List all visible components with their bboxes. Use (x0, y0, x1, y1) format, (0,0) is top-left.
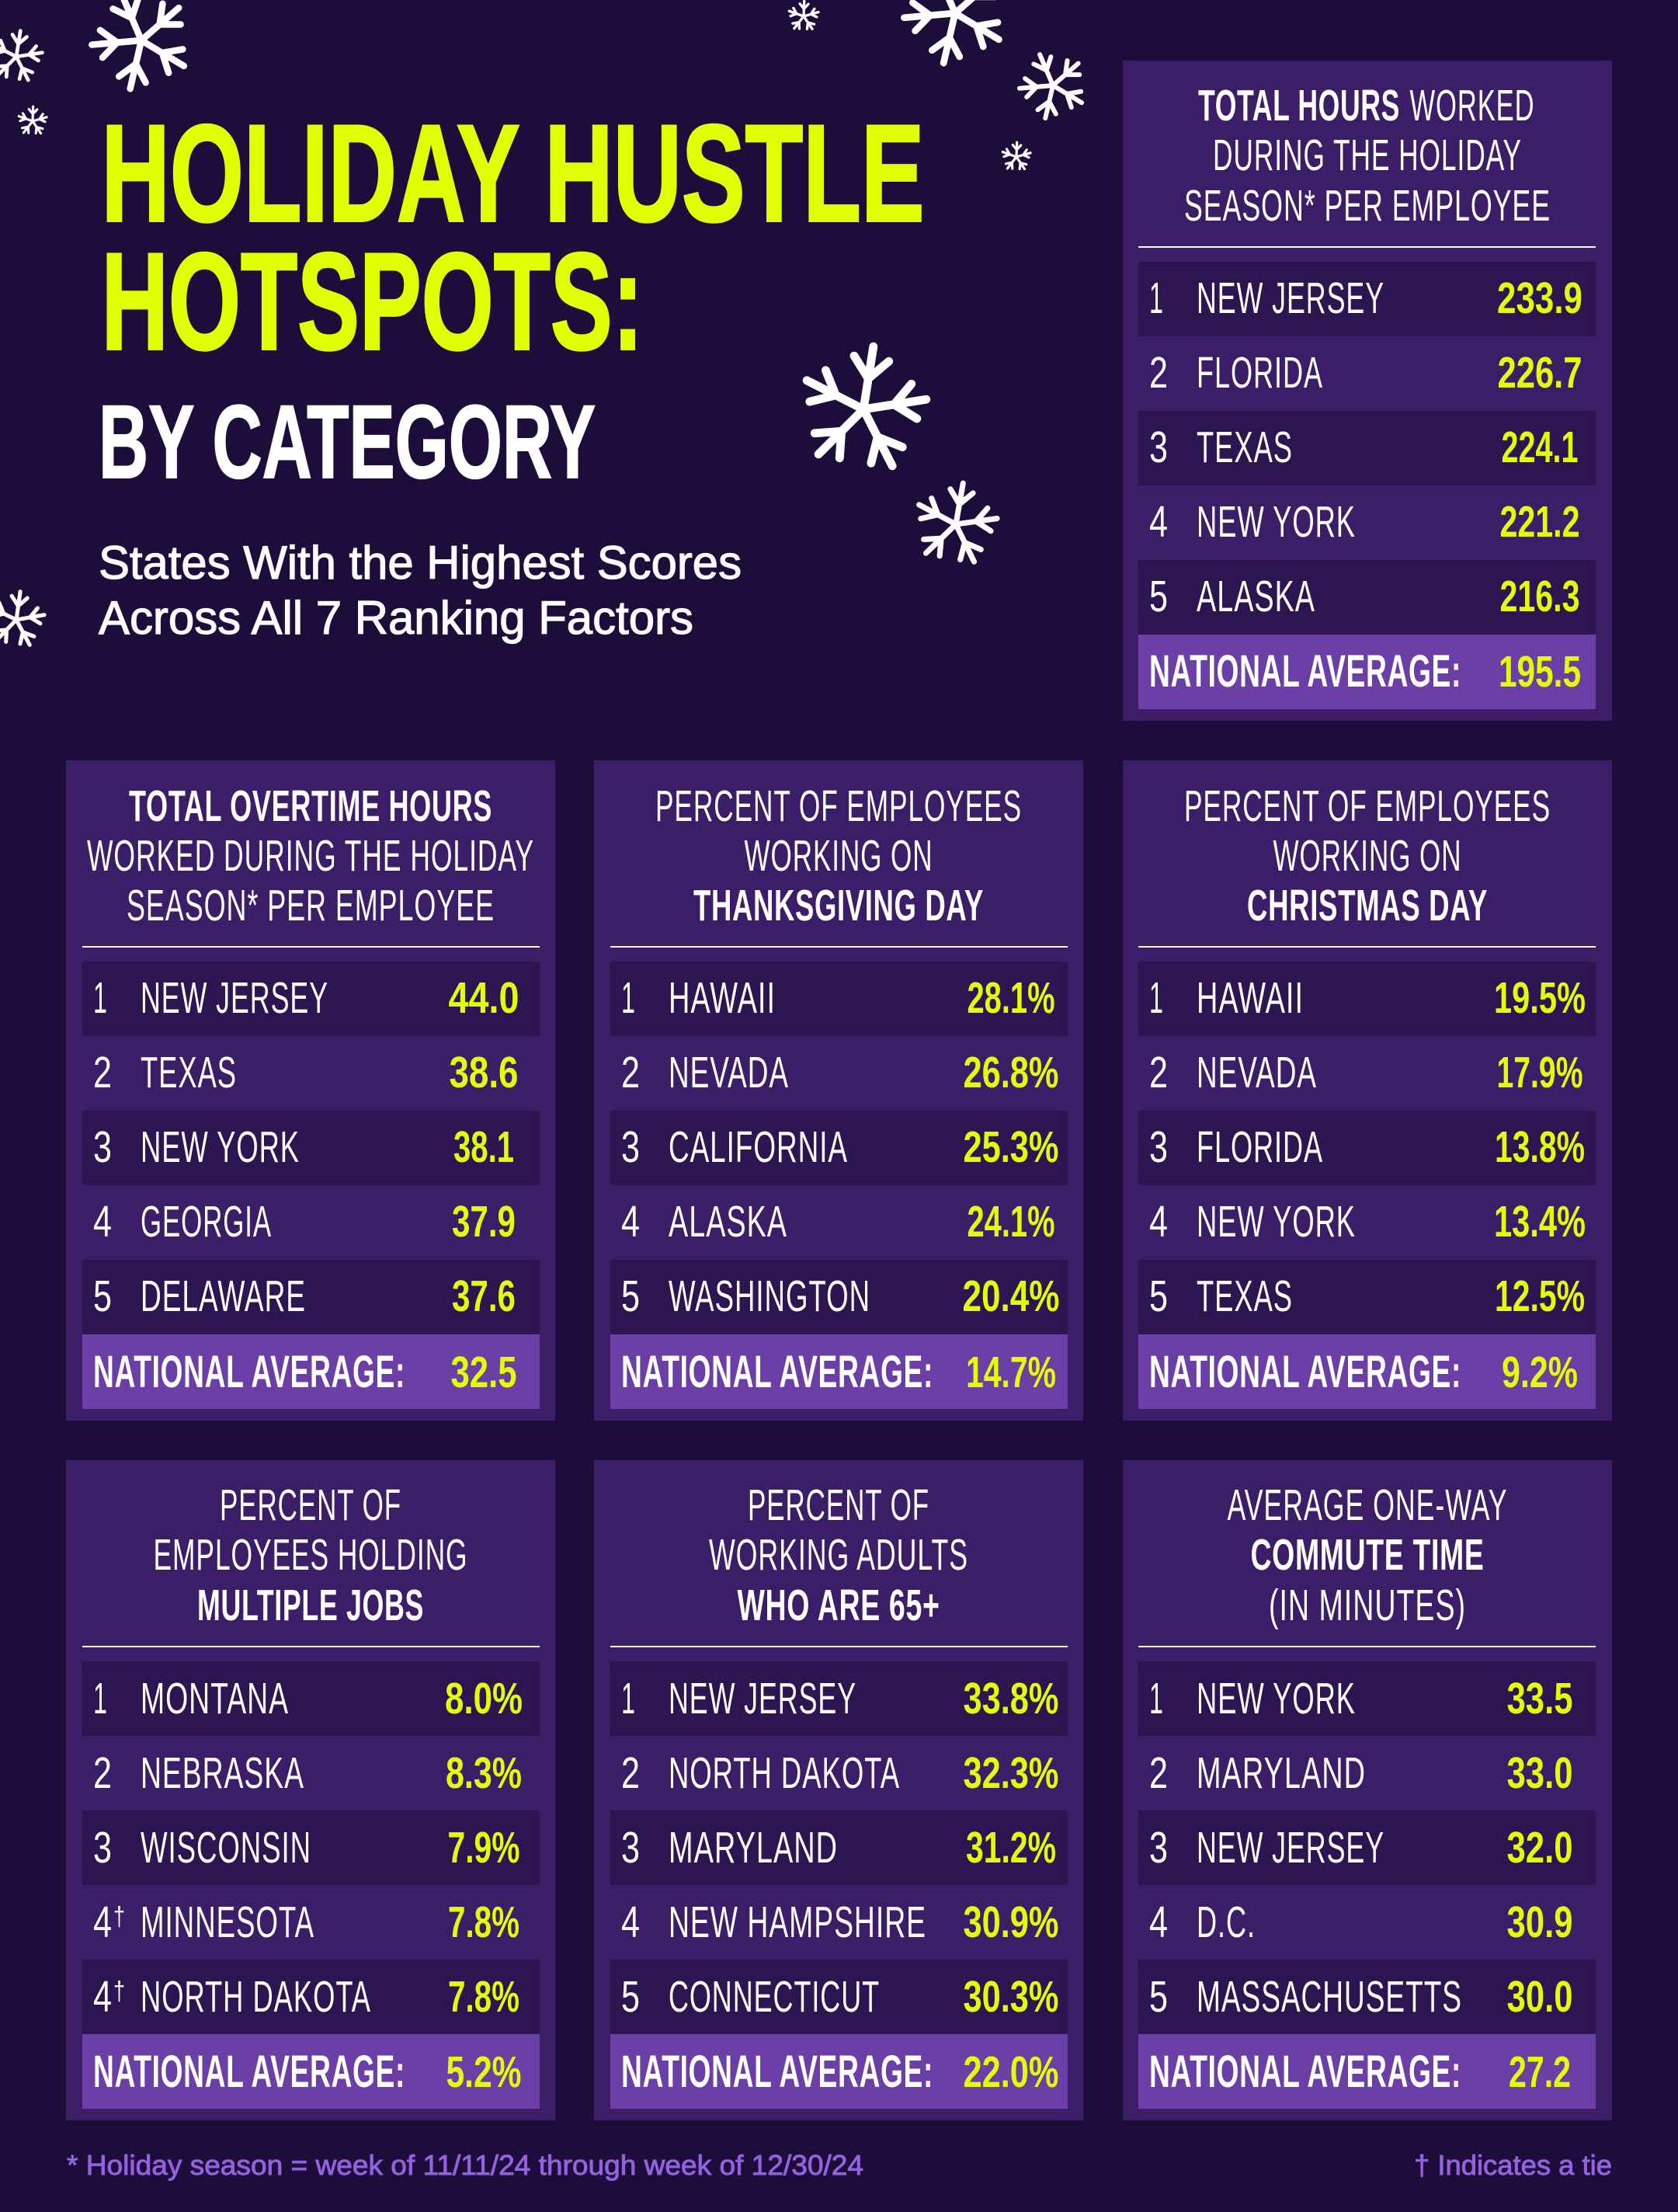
row 2: MARYLAND (1197, 1748, 1366, 1798)
row 2: 38.6 (449, 1048, 519, 1097)
row 2: 2 (621, 1048, 640, 1097)
row 1: NEW JERSEY (141, 973, 328, 1023)
heading: working adults 65+: WHO ARE 65+ (738, 1581, 940, 1630)
row 2: FLORIDA (1197, 348, 1323, 398)
row 5: 216.3 (1500, 572, 1579, 621)
row 1: 1 (1149, 973, 1163, 1023)
national average: NATIONAL AVERAGE: (1149, 2047, 1461, 2097)
row 4: NEW HAMPSHIRE (669, 1897, 926, 1947)
row 2: NEBRASKA (141, 1748, 304, 1798)
row 3: 3 (621, 1823, 640, 1873)
row 3 (1138, 1111, 1596, 1185)
row 2: 17.9% (1497, 1048, 1582, 1097)
row 5: 20.4% (963, 1271, 1059, 1321)
national average: 9.2% (1502, 1348, 1578, 1397)
row 5: MASSACHUSETTS (1197, 1972, 1462, 2022)
row 1: 1 (1149, 273, 1163, 323)
row 2 (93, 1748, 522, 1798)
row 4: D.C. (1197, 1897, 1256, 1947)
row 5: NORTH DAKOTA (141, 1972, 371, 2022)
heading: overtime hours: TOTAL OVERTIME HOURS (129, 781, 492, 831)
row 2: 2 (621, 1748, 640, 1798)
row 1: 44.0 (449, 973, 519, 1023)
heading: total hours worked: WORKED (1410, 81, 1534, 130)
national average (82, 1334, 540, 1409)
row 4: 24.1% (968, 1197, 1054, 1247)
row 2: 2 (93, 1048, 112, 1097)
icon: snowflake small left (17, 106, 48, 136)
panel: christmas day (1123, 760, 1612, 1421)
row 5: 37.6 (452, 1271, 516, 1321)
row 3 (1138, 411, 1596, 485)
row 1: 1 (93, 973, 107, 1023)
heading: overtime hours: SEASON* PER EMPLOYEE (127, 881, 495, 930)
row 3: TEXAS (1197, 423, 1293, 472)
row 1: 1 (621, 973, 635, 1023)
row 2: TEXAS (141, 1048, 237, 1097)
row 5: 7.8% (448, 1972, 519, 2022)
row 4: 7.8% (448, 1897, 519, 1947)
heading: multiple jobs: PERCENT OF (220, 1480, 401, 1530)
national average (610, 2034, 1068, 2109)
row 3: 7.9% (447, 1823, 520, 1873)
icon: snowflake big center (789, 336, 939, 481)
icon: snowflake small right (1001, 142, 1032, 172)
row 5: 5 (1149, 1271, 1168, 1321)
national average: 22.0% (963, 2047, 1059, 2097)
row 3: 38.1 (453, 1122, 514, 1172)
row 4: ALASKA (669, 1197, 787, 1247)
row 4: GEORGIA (141, 1197, 272, 1247)
heading: overtime hours (87, 781, 534, 930)
row 4: 37.9 (452, 1197, 516, 1247)
row 2: 2 (1149, 1748, 1168, 1798)
heading: christmas day: CHRISTMAS DAY (1247, 881, 1488, 930)
row 1: 1 (1149, 1674, 1163, 1723)
row 1: 33.5 (1506, 1674, 1573, 1723)
row 5: ALASKA (1197, 572, 1315, 621)
footnote: holiday season: * Holiday season = week of 11/11/24 through week of 12/30/24 (67, 2149, 863, 2181)
row 3: FLORIDA (1197, 1122, 1323, 1172)
heading: working adults 65+: WORKING ADULTS (709, 1530, 968, 1580)
row 1: HAWAII (1197, 973, 1304, 1023)
row 3: 25.3% (963, 1122, 1059, 1172)
national average (82, 2034, 540, 2109)
panel: total hours worked (1123, 61, 1612, 721)
row 2: 226.7 (1497, 348, 1582, 398)
heading: commute time: (IN MINUTES) (1269, 1581, 1466, 1630)
row 2: 32.3% (963, 1748, 1059, 1798)
row 1 (1138, 262, 1596, 336)
row 1 (1138, 1661, 1596, 1736)
row 3: 13.8% (1495, 1122, 1585, 1172)
row 5 (1138, 1960, 1596, 2034)
row 1 (610, 962, 1068, 1036)
icon: snowflake top left large (71, 0, 213, 111)
icon: snowflake right medium (1006, 37, 1101, 133)
row 1: NEW JERSEY (1197, 273, 1384, 323)
row 5: 5 (93, 1271, 112, 1321)
row 2 (1149, 348, 1582, 398)
heading: total hours worked: TOTAL HOURS (1198, 81, 1400, 130)
heading: multiple jobs (154, 1480, 467, 1630)
national average: 14.7% (966, 1348, 1056, 1397)
row 5: 5 (621, 1271, 640, 1321)
row 3: 224.1 (1502, 423, 1578, 472)
national average: NATIONAL AVERAGE: (93, 1347, 405, 1397)
footnote: tie: † Indicates a tie (1414, 2149, 1612, 2181)
heading: thanksgiving day: WORKING ON (744, 831, 933, 881)
row 2 (621, 1048, 1059, 1097)
national average (610, 1334, 1068, 1409)
icon: snowflake medium center (906, 476, 1006, 572)
row 2: 2 (1149, 348, 1168, 398)
row 1: 1 (93, 1674, 107, 1723)
row 3: 3 (1149, 1823, 1168, 1873)
national average: NATIONAL AVERAGE: (93, 2047, 405, 2097)
row 1: MONTANA (141, 1674, 289, 1723)
row 3 (610, 1111, 1068, 1185)
row 3 (1138, 1810, 1596, 1885)
row 1 (82, 1661, 540, 1736)
panel: overtime hours (66, 760, 555, 1421)
row 5 (82, 1960, 540, 2034)
heading: working adults 65+: PERCENT OF (748, 1480, 929, 1530)
row 3: 3 (93, 1823, 112, 1873)
row 2: 2 (1149, 1048, 1168, 1097)
row 2: NEVADA (1197, 1048, 1317, 1097)
row 3: CALIFORNIA (669, 1122, 848, 1172)
row 1: NEW YORK (1197, 1674, 1356, 1723)
row 1: 19.5% (1494, 973, 1586, 1023)
row 1 (82, 962, 540, 1036)
heading: commute time (1227, 1480, 1508, 1630)
panel: multiple jobs (66, 1460, 555, 2120)
heading: thanksgiving day (655, 781, 1022, 930)
row 5 (1138, 560, 1596, 635)
row 4: 221.2 (1500, 497, 1579, 547)
title: HOLIDAY HUSTLE (101, 96, 924, 250)
row 4: † (113, 1902, 125, 1932)
title (101, 96, 924, 379)
row 2: NEVADA (669, 1048, 789, 1097)
heading: thanksgiving day: PERCENT OF EMPLOYEES (655, 781, 1022, 831)
row 2 (93, 1048, 519, 1097)
row 5: 12.5% (1495, 1271, 1585, 1321)
row 2 (1149, 1748, 1573, 1798)
row 5 (610, 1960, 1068, 2034)
row 3: MARYLAND (669, 1823, 838, 1873)
row 5: DELAWARE (141, 1271, 306, 1321)
row 4: 4 (1149, 497, 1168, 547)
row 5: 30.3% (963, 1972, 1059, 2022)
heading: thanksgiving day: THANKSGIVING DAY (693, 881, 984, 930)
national average (1138, 1334, 1596, 1409)
title: HOTSPOTS: (101, 224, 643, 379)
row 4: 13.4% (1494, 1197, 1586, 1247)
heading: multiple jobs: EMPLOYEES HOLDING (154, 1530, 467, 1580)
row 1: 233.9 (1497, 273, 1582, 323)
row 5: 4 (93, 1972, 112, 2022)
row 2: NORTH DAKOTA (669, 1748, 900, 1798)
subtitle: by category: BY CATEGORY (99, 384, 596, 500)
row 1: 8.0% (445, 1674, 523, 1723)
icon: snowflake small top (787, 1, 820, 32)
icon: snowflake top right large (883, 0, 1028, 85)
row 2: 8.3% (446, 1748, 522, 1798)
row 5: 5 (1149, 572, 1168, 621)
row 4: NEW YORK (1197, 1197, 1356, 1247)
row 5 (82, 1260, 540, 1334)
national average: NATIONAL AVERAGE: (621, 1347, 933, 1397)
row 4 (1149, 1197, 1586, 1247)
description text (99, 537, 742, 644)
icon: snowflake left edge (0, 26, 47, 86)
row 1: 1 (621, 1674, 635, 1723)
row 3: 32.0 (1506, 1823, 1573, 1873)
row 2: 33.0 (1506, 1748, 1573, 1798)
row 5: 30.0 (1506, 1972, 1573, 2022)
row 4 (93, 1897, 519, 1947)
row 3 (82, 1111, 540, 1185)
row 3: 3 (1149, 423, 1168, 472)
row 5: CONNECTICUT (669, 1972, 880, 2022)
row 3: NEW YORK (141, 1122, 300, 1172)
row 4: 4 (1149, 1897, 1168, 1947)
heading: working adults 65+ (709, 1480, 968, 1630)
row 5 (610, 1260, 1068, 1334)
national average (1138, 2034, 1596, 2109)
national average: 32.5 (450, 1348, 517, 1397)
row 4: 4 (621, 1197, 640, 1247)
description text: Across All 7 Ranking Factors (99, 592, 693, 644)
row 5 (1138, 1260, 1596, 1334)
heading: commute time: COMMUTE TIME (1250, 1530, 1485, 1580)
row 4 (1149, 497, 1579, 547)
national average: 5.2% (446, 2047, 522, 2097)
row 4: 4 (1149, 1197, 1168, 1247)
icon: snowflake left edge lower (0, 587, 50, 652)
row 3: 3 (621, 1122, 640, 1172)
row 2: 2 (93, 1748, 112, 1798)
row 4 (621, 1197, 1054, 1247)
national average: 27.2 (1509, 2047, 1571, 2097)
row 4: 30.9 (1506, 1897, 1573, 1947)
row 4: 4 (621, 1897, 640, 1947)
row 3: 3 (1149, 1122, 1168, 1172)
row 4: 4 (93, 1897, 112, 1947)
description text: States With the Highest Scores (99, 537, 742, 589)
heading: multiple jobs: MULTIPLE JOBS (197, 1581, 424, 1630)
heading: commute time: AVERAGE ONE-WAY (1227, 1480, 1508, 1530)
heading: total hours worked (1184, 81, 1551, 231)
row 2 (1149, 1048, 1582, 1097)
row 1: 28.1% (968, 973, 1054, 1023)
row 4: 4 (93, 1197, 112, 1247)
row 1 (610, 1661, 1068, 1736)
national average: NATIONAL AVERAGE: (1149, 646, 1461, 697)
row 1: NEW JERSEY (669, 1674, 856, 1723)
row 3: 3 (93, 1122, 112, 1172)
heading: overtime hours: WORKED DURING THE HOLIDAY (87, 831, 534, 881)
row 4: NEW YORK (1197, 497, 1356, 547)
row 3: WISCONSIN (141, 1823, 311, 1873)
row 3: NEW JERSEY (1197, 1823, 1384, 1873)
row 5: TEXAS (1197, 1271, 1293, 1321)
row 4: 30.9% (963, 1897, 1059, 1947)
national average (1138, 635, 1596, 709)
national average: NATIONAL AVERAGE: (621, 2047, 933, 2097)
row 1: 33.8% (963, 1674, 1059, 1723)
heading: christmas day (1184, 781, 1551, 930)
row 5: WASHINGTON (669, 1271, 870, 1321)
row 5: † (113, 1977, 125, 2006)
row 3 (82, 1810, 540, 1885)
row 1 (1138, 962, 1596, 1036)
panel: working adults 65+ (594, 1460, 1083, 2120)
row 5: 5 (1149, 1972, 1168, 2022)
row 4 (1149, 1897, 1573, 1947)
row 4 (93, 1197, 516, 1247)
row 4: MINNESOTA (141, 1897, 314, 1947)
national average: 195.5 (1499, 647, 1581, 697)
row 2: 26.8% (963, 1048, 1059, 1097)
row 1: HAWAII (669, 973, 776, 1023)
row 3 (610, 1810, 1068, 1885)
row 3: 31.2% (966, 1823, 1056, 1873)
heading: christmas day: WORKING ON (1273, 831, 1461, 881)
panel: thanksgiving day (594, 760, 1083, 1421)
panel: commute time (1123, 1460, 1612, 2120)
row 5: 5 (621, 1972, 640, 2022)
national average: NATIONAL AVERAGE: (1149, 1347, 1461, 1397)
